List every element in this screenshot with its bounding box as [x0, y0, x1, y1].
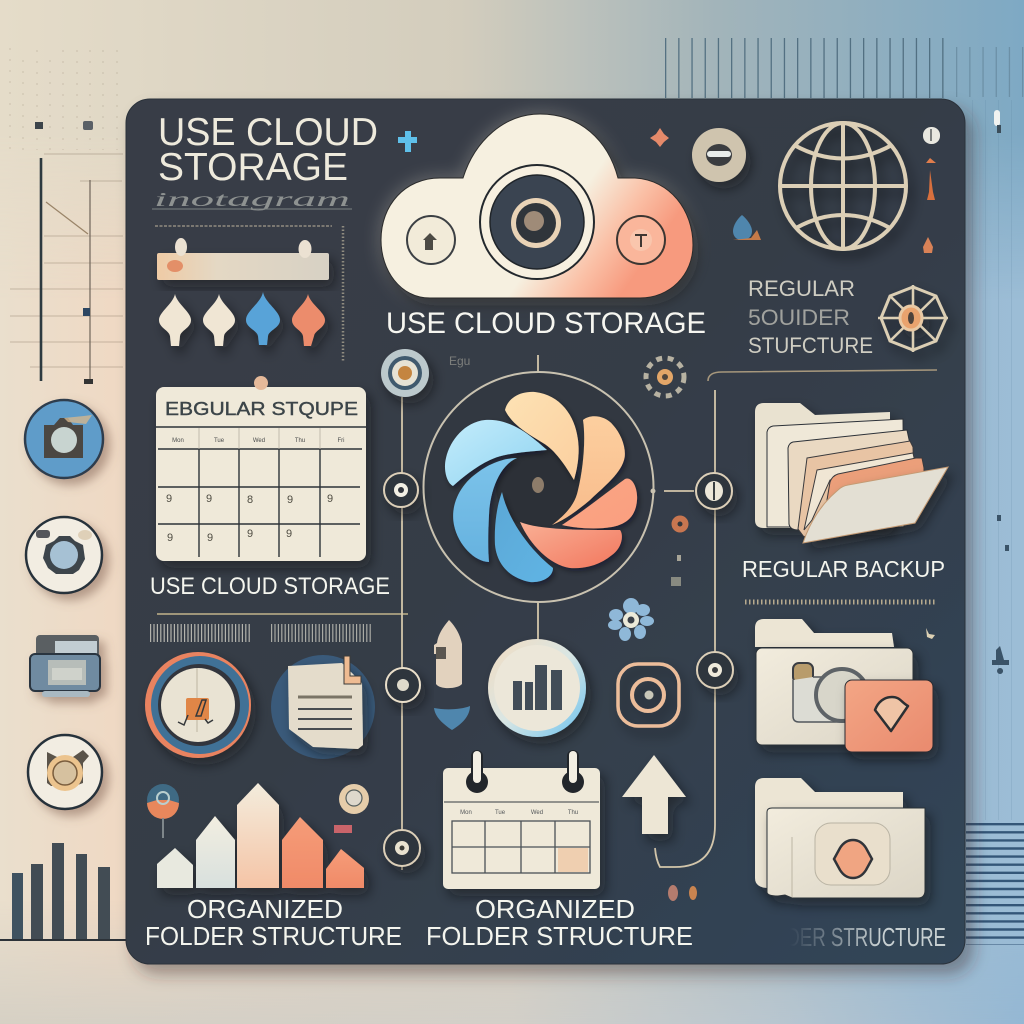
icon: wheel: [878, 285, 948, 352]
label: organized folder structure (center): FOLDER STRUCTURE: [426, 921, 693, 951]
label: organized folder structure (center): [426, 894, 693, 951]
subtitle scribble: inotagram: [154, 189, 350, 211]
icon: blue camera badge: [25, 400, 103, 478]
connector lines: [402, 355, 937, 870]
icon: blue flower: [608, 598, 654, 641]
calendar: bottom: Tue: [495, 810, 506, 816]
label: faded structure: FOLDER STRUCTURE: [750, 922, 946, 952]
calendar: schedule: 9: [286, 528, 292, 540]
top right tick marks: [665, 68, 1024, 72]
icon: dotted gauge: [646, 358, 684, 396]
left icons column: [25, 400, 103, 809]
calendar: schedule: Wed: [253, 438, 265, 444]
drop markers: [159, 292, 325, 346]
small accent: [926, 628, 935, 639]
icon: rocket: [434, 620, 470, 730]
calendar: bottom: Thu: [568, 810, 578, 816]
label: regular backup: REGULAR BACKUP: [742, 556, 945, 582]
icon: folder with badge: [755, 778, 925, 898]
icon: top button: [692, 128, 746, 182]
cloud lens: [480, 165, 594, 279]
icon: globe: [780, 123, 906, 249]
calendar: schedule: 9: [247, 528, 253, 540]
calendar: schedule: Tue: [214, 438, 225, 444]
calendar: bottom: Wed: [531, 810, 543, 816]
text block: regular folder structure: [748, 276, 873, 358]
text block: regular folder structure: STUFCTURE: [748, 333, 873, 358]
calendar: schedule: Fri: [338, 438, 344, 444]
calendar: schedule: 9: [287, 494, 293, 506]
icon: printer: [30, 635, 100, 697]
label: organized folder structure (left): [145, 894, 402, 951]
label: organized folder structure (left): FOLDER STRUCTURE: [145, 921, 402, 951]
blue plus: [398, 131, 417, 152]
timeline nodes: [384, 473, 733, 866]
small orange ring: [671, 516, 688, 586]
icon: cream camera badge: [26, 517, 102, 593]
orange star: [650, 128, 669, 147]
slider bar: [157, 238, 329, 280]
calendar: bottom: [443, 750, 600, 889]
calendar: schedule: 9: [167, 532, 173, 544]
calendar: schedule: 9: [327, 493, 333, 505]
calendar: bottom: Mon: [460, 810, 472, 816]
main title: STORAGE: [158, 146, 348, 189]
icon: camera square: [618, 664, 679, 726]
left background grid chart: [10, 48, 123, 384]
calendar: schedule: Mon: [172, 438, 184, 444]
cloud left button: [407, 216, 455, 264]
pinwheel logo: [445, 392, 637, 582]
label: organized folder structure (left): ORGANIZED: [187, 894, 343, 924]
main title: [158, 111, 378, 189]
cloud right button: [617, 216, 665, 264]
calendar: schedule: 9: [166, 493, 172, 505]
right background grid: [972, 110, 1024, 674]
calendar: schedule: [156, 376, 366, 561]
centre circle: [424, 372, 656, 602]
icon: bar chart badge: [488, 639, 586, 737]
document badge: [271, 655, 375, 759]
calendar: schedule: Thu: [295, 438, 305, 444]
icon: folder with camera: [755, 619, 933, 752]
ring badge: [145, 652, 251, 758]
label: use cloud storage (left): USE CLOUD STORAGE: [150, 573, 390, 600]
arrow up: [622, 755, 686, 834]
small dots: [668, 885, 697, 901]
small accent marks: [733, 127, 940, 253]
calendar: schedule: EBGULAR STQUPE: [165, 399, 358, 419]
label: use cloud storage (center): USE CLOUD STORAGE: [386, 307, 706, 340]
label: organized folder structure (center): ORGANIZED: [475, 894, 635, 924]
main dark panel: [126, 99, 965, 964]
arrow bar chart: [157, 783, 364, 888]
icon: round camera: [28, 735, 102, 809]
node: top ring: [381, 349, 429, 397]
small pin icons: [147, 784, 369, 838]
right stripes: [966, 823, 1024, 945]
main title: USE CLOUD: [158, 111, 378, 154]
small scribble: Egu: [449, 354, 470, 368]
calendar: schedule: 9: [207, 532, 213, 544]
text block: regular folder structure: 5OUIDER: [748, 305, 850, 330]
icon: open folder with papers: [755, 403, 948, 543]
main cloud: [381, 114, 693, 298]
calendar: schedule: 9: [206, 493, 212, 505]
left bar chart: [0, 843, 126, 941]
calendar: schedule: 8: [247, 494, 253, 506]
text block: regular folder structure: REGULAR: [748, 276, 855, 301]
